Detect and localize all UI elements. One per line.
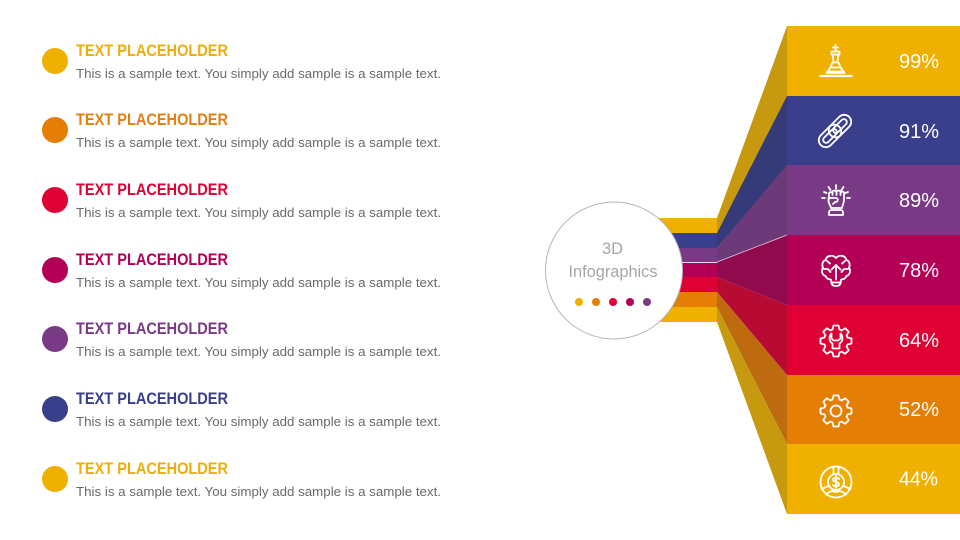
bar 7: 44% <box>787 444 960 514</box>
bar 2: 91%: 91% <box>899 120 939 143</box>
list item 6: This is a sample text. You simply add sample is a sample text. <box>76 414 441 429</box>
dots row <box>575 298 651 306</box>
bar 6: 52% <box>787 375 960 444</box>
list item 2 <box>42 111 441 150</box>
bar 7: 44%: 44% <box>899 468 938 490</box>
icon: gear <box>820 396 852 426</box>
list item 3 <box>42 181 441 220</box>
list item 2: TEXT PLACEHOLDER <box>76 111 228 129</box>
list item 5: This is a sample text. You simply add sample is a sample text. <box>76 344 441 359</box>
list item 6 <box>42 390 441 429</box>
bar 1: 99% <box>787 26 960 96</box>
bar 2: 91% <box>787 96 960 165</box>
center circle <box>546 202 682 339</box>
list item 5 <box>42 320 441 359</box>
list item 4: TEXT PLACEHOLDER <box>76 251 228 269</box>
icon: chain link <box>816 112 854 150</box>
bar 5: 64% <box>787 305 960 375</box>
icon: gear with wrench <box>820 326 852 356</box>
list item 7: This is a sample text. You simply add sample is a sample text. <box>76 484 441 499</box>
bar 1: 99%: 99% <box>899 50 939 73</box>
icon: raised fist <box>822 185 850 215</box>
list item 6: TEXT PLACEHOLDER <box>76 390 228 408</box>
list item 1 <box>42 42 441 81</box>
horizontal feed bands <box>650 218 717 322</box>
bar 4: 78% <box>787 235 960 305</box>
circle label: Infographics <box>568 263 658 281</box>
bar 3: 89%: 89% <box>899 189 939 212</box>
bar 4: 78%: 78% <box>899 259 939 282</box>
list item 7: TEXT PLACEHOLDER <box>76 460 228 478</box>
list item 3: This is a sample text. You simply add sample is a sample text. <box>76 205 441 220</box>
list item 4: This is a sample text. You simply add sample is a sample text. <box>76 275 441 290</box>
list item 1: TEXT PLACEHOLDER <box>76 42 228 60</box>
icon: chess king <box>820 45 852 76</box>
icon: dollar chart ring <box>820 466 852 498</box>
list item 7 <box>42 460 441 499</box>
funnel side panels <box>717 26 787 514</box>
list item 5: TEXT PLACEHOLDER <box>76 320 228 338</box>
list item 4 <box>42 251 441 290</box>
list item 1: This is a sample text. You simply add sample is a sample text. <box>76 66 441 81</box>
circle label: 3D <box>602 240 623 258</box>
bar 6: 52%: 52% <box>899 398 939 421</box>
icon: brain bulb <box>822 256 850 286</box>
list item 3: TEXT PLACEHOLDER <box>76 181 228 199</box>
bar 3: 89% <box>787 165 960 235</box>
bar 5: 64%: 64% <box>899 329 939 352</box>
list item 2: This is a sample text. You simply add sample is a sample text. <box>76 135 441 150</box>
